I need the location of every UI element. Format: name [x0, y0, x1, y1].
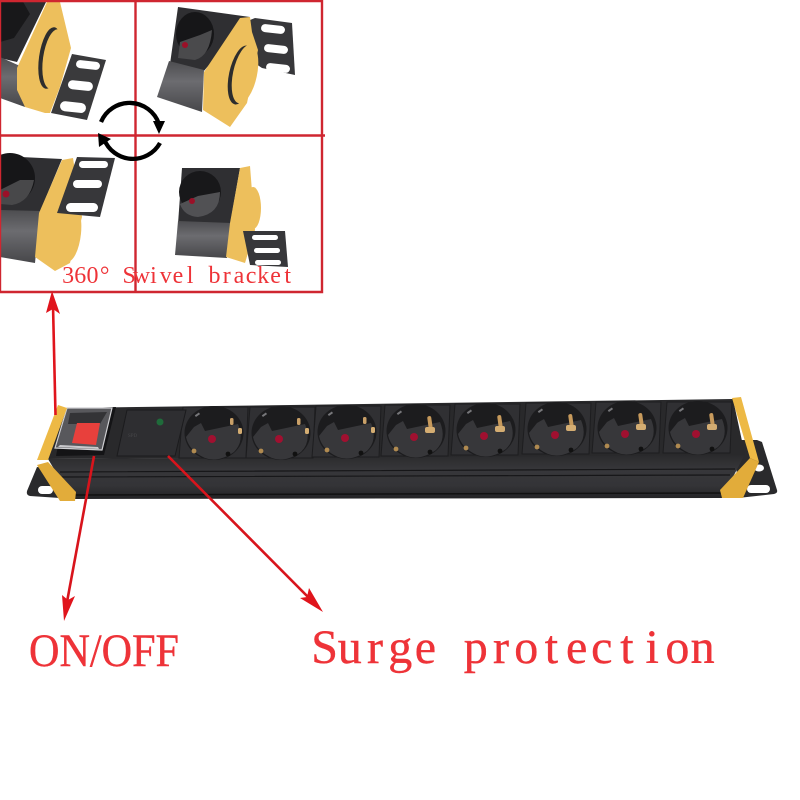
on/off switch [55, 407, 116, 456]
label: surge protection: Surge protection [311, 621, 715, 674]
socket 8 [663, 401, 732, 455]
arrow: to on/off switch [62, 456, 94, 621]
arrow: to swivel bracket [46, 291, 60, 415]
arrow: to surge protection [168, 456, 323, 612]
icon: rotation arrows [98, 103, 165, 159]
view: top-right bracket position [157, 7, 295, 127]
left end cap [37, 405, 76, 501]
view: top-left bracket position [0, 0, 106, 120]
socket 3 [312, 405, 381, 459]
label: on/off: ON/OFF [29, 625, 179, 677]
power strip [27, 397, 777, 501]
right mounting bracket [735, 440, 777, 498]
view: bottom-right bracket position [175, 166, 288, 267]
socket 4 [381, 404, 450, 458]
left mounting bracket [27, 467, 62, 498]
panel: swivel bracket views [0, 0, 325, 293]
surge protection module: SPD [128, 434, 138, 439]
view: bottom-left bracket position [0, 153, 115, 271]
socket 5 [451, 403, 520, 457]
socket 2 [246, 406, 315, 460]
label: 360 swivel bracket: 360° Swivel bracket [62, 263, 291, 289]
socket 1 [179, 406, 248, 460]
surge protection module [117, 410, 186, 456]
strip body [48, 454, 745, 499]
socket 7 [592, 401, 661, 455]
socket 6 [522, 402, 591, 456]
right end cap [720, 397, 759, 498]
grid frame lines [0, 0, 325, 293]
strip front face [48, 399, 745, 459]
